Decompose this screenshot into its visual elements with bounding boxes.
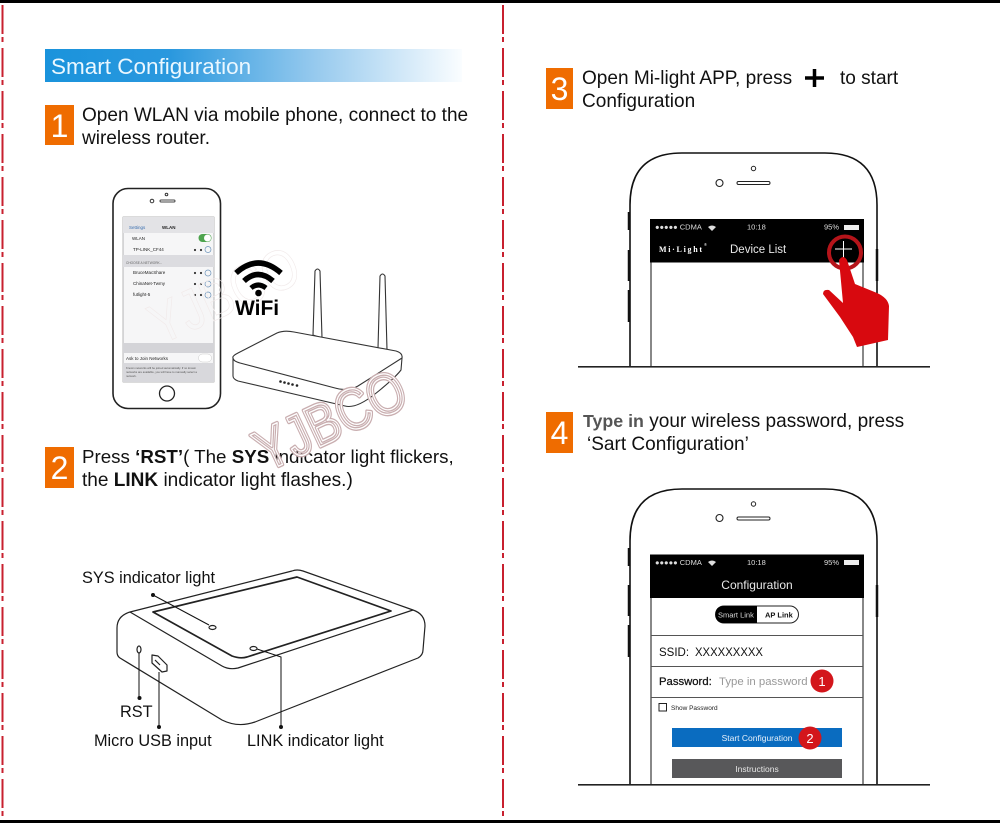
password row [659,670,834,692]
password row: 1 [818,674,826,689]
step 2 text: the LINK indicator light flashes.) [82,470,353,491]
step 2 text: Press ‘RST’( The SYS indicator light flickers, [82,446,454,467]
labels: SYS indicator light [82,569,216,587]
phone: Configuration screen [629,489,877,785]
phone with WLAN settings: TP-LINK_CF44 [133,247,164,252]
phone with WLAN settings [113,188,220,408]
step 3 text: to start [840,68,899,89]
step 1 badge [45,105,74,145]
SSID row: SSID: [659,647,689,659]
labels: Micro USB input [94,732,212,750]
device body [117,570,425,725]
SSID row: XXXXXXXXX [695,647,763,659]
step 3 badge: 3 [551,71,568,107]
phone: Device List screen: 95% [824,222,839,232]
leader lines [139,595,281,727]
icon: plus [805,69,824,87]
phone: Configuration screen: 10:18 [747,558,766,567]
wireless router [233,269,402,406]
icon: WiFi [235,263,281,320]
watermark: YJBCO: YJBCO [244,357,417,484]
phone: Configuration screen: ●●●●● CDMA [655,558,702,567]
step 2 badge: 2 [51,450,68,486]
phone with WLAN settings: BruceMacShare [133,270,166,275]
start configuration button: 2 [806,731,814,746]
phone: Device List screen [629,153,889,367]
SSID row [659,647,763,659]
phone with WLAN settings: CHOOSE A NETWORK... [126,261,162,265]
step 4 badge: 4 [551,415,568,451]
show password checkbox: Show Password [671,705,718,712]
password row: Type in password [719,676,808,688]
step 2 text [82,446,454,491]
phone with WLAN settings: Known networks will be joined automatically. If no known [126,366,197,370]
step 1 badge: 1 [51,108,68,144]
step 4 text: Type in your wireless password, press [583,411,904,432]
labels: RST [120,703,153,721]
phone with WLAN settings: networks are available, you will have to manually select a [126,370,197,374]
phone with WLAN settings: futlight-5 [133,292,151,297]
icon: tap hand on plus [823,236,889,347]
watermark: faint YJBCO on phone: YJBCO [139,234,310,357]
phone with WLAN settings: Ask to Join Networks [126,356,169,361]
step 1 text [81,105,468,149]
step 3 badge [546,68,573,109]
instructions button [672,759,842,778]
phone: Device List screen: ® [704,242,707,247]
heading banner: Smart Configuration [45,49,462,82]
phone: Configuration screen: Configuration [721,578,793,592]
phone: Device List screen: 10:18 [747,222,766,232]
start configuration button [672,726,842,750]
phone with WLAN settings: ChinaNet-Twmy [133,281,166,286]
heading banner: Smart Configuration: Smart Configuration [51,54,251,79]
step 2 badge [45,447,74,488]
phone with WLAN settings: network. [126,374,137,378]
Smart Link / AP Link toggle: AP Link [765,610,794,620]
phone with WLAN settings: Settings [129,225,146,230]
phone: Device List screen: Device List [730,244,787,256]
start configuration button: Start Configuration [722,733,793,743]
instructions button: Instructions [735,764,779,774]
show password checkbox [659,704,718,712]
phone: Configuration screen: 95% [824,558,839,567]
phone with WLAN settings: WLAN [162,225,176,230]
labels: LINK indicator light [247,732,384,750]
step 3 text: Open Mi-light APP, press [582,68,792,89]
step 3 text: Configuration [582,91,695,112]
step 3 text [582,68,899,112]
password row: Password: [659,676,712,688]
phone with WLAN settings: WLAN [132,236,145,241]
phone: Device List screen: Mi·Light [659,245,704,254]
watermark: YJBCO: YJBCO [244,357,417,484]
Smart Link / AP Link toggle [716,606,798,623]
icon: WiFi: WiFi [235,297,279,320]
step 4 text: ‘Sart Configuration’ [587,434,749,455]
step 4 text [583,411,904,455]
phone: Device List screen: ●●●●● CDMA [655,222,702,232]
Smart Link / AP Link toggle: Smart Link [718,610,754,620]
device diagram with labels [82,569,425,750]
step 1 text: wireless router. [81,128,210,149]
labels [82,569,384,750]
step 1 text: Open WLAN via mobile phone, connect to the [82,105,468,126]
step 4 badge [546,412,573,453]
